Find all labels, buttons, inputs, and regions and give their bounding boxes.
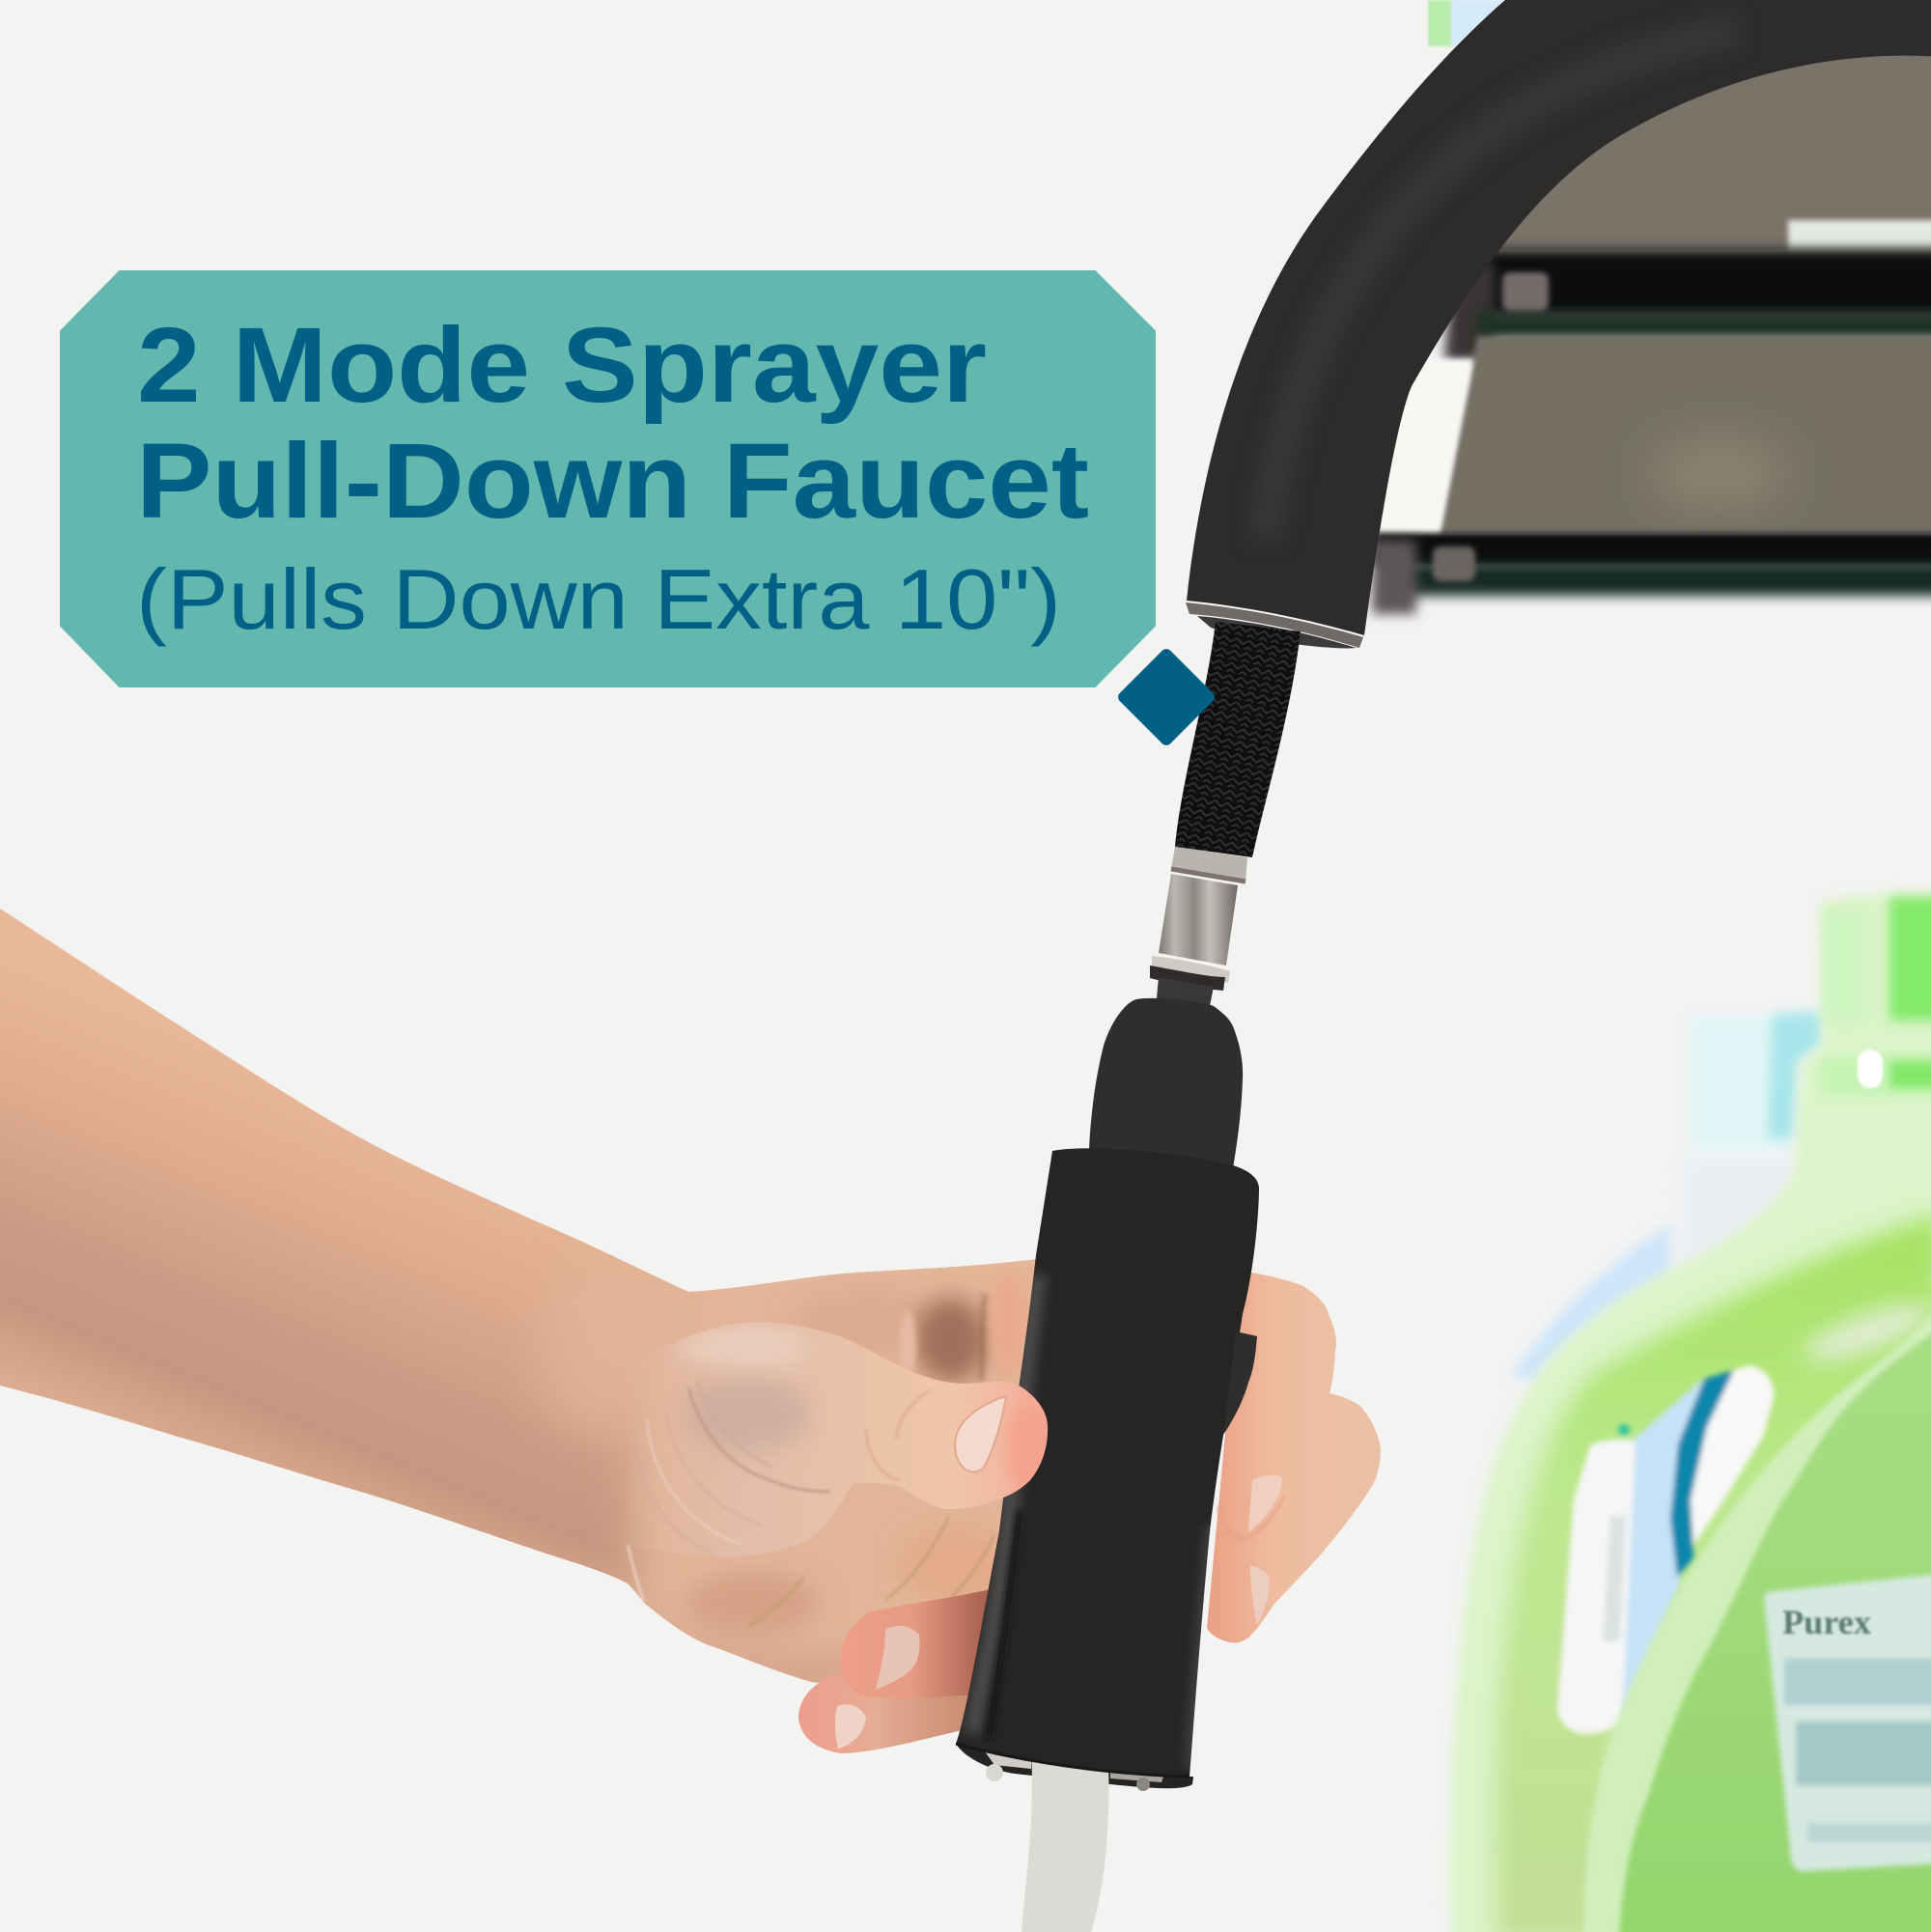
pinky finger: [798, 1670, 975, 1753]
middle finger: [840, 1588, 994, 1697]
blurred product label: Purex: [1782, 1603, 1871, 1641]
green bottle silhouette: [1450, 893, 1931, 1932]
soft hand colouring: [553, 1259, 1035, 1676]
right lit edge: [1191, 1526, 1213, 1767]
heading line 2: Pull-Down Faucet: [136, 422, 1089, 541]
heading line 1: 2 Mode Sprayer: [137, 306, 987, 425]
braided hose: [1175, 622, 1301, 857]
middle nail: [876, 1626, 920, 1690]
metal hose ferrule: [1150, 847, 1247, 1006]
water stream: [1021, 1753, 1108, 1932]
bottom rim line: [956, 1744, 1189, 1777]
spout highlight: [1265, 29, 1738, 541]
blurred shelf behind faucet: [1372, 0, 1931, 614]
sprayer head and neck: [956, 998, 1259, 1777]
pink thumb tip: [1006, 1405, 1045, 1492]
green bottle body shading: [1495, 1215, 1931, 1932]
side button: [1223, 1331, 1257, 1435]
bottle cap and neck colours: [1889, 897, 1931, 1021]
sprayer body: [956, 1148, 1259, 1777]
thumbnail: [955, 1396, 1006, 1471]
subheading: (Pulls Down Extra 10"): [136, 551, 1061, 647]
detergent bottles, blurred: [1450, 893, 1931, 1932]
spray nozzle underside: [956, 1744, 1193, 1791]
nail one: [1248, 1475, 1282, 1532]
faucet spout arch: [1186, 0, 1931, 648]
skin creases: [628, 1381, 930, 1603]
mound shading: [686, 1378, 811, 1451]
nail two: [1250, 1566, 1270, 1625]
callout pointer diamond: [1116, 647, 1217, 747]
palm folds: [748, 1516, 994, 1627]
thumb and thenar mound: [628, 1322, 1048, 1603]
handle opening: [1557, 1365, 1774, 1733]
spout metal rim: [1186, 602, 1363, 648]
pinky nail: [835, 1704, 866, 1749]
left lit strip: [971, 1274, 1038, 1733]
fingers on right of sprayer: [1207, 1271, 1381, 1643]
blurred product label: [1764, 1574, 1931, 1871]
dome neck: [1089, 998, 1243, 1168]
pale blue bottle behind: [1511, 1012, 1823, 1381]
callout box: [61, 271, 1155, 686]
forearm and back of hand: [0, 909, 1072, 1709]
front panel of bottle: [1583, 1308, 1931, 1932]
